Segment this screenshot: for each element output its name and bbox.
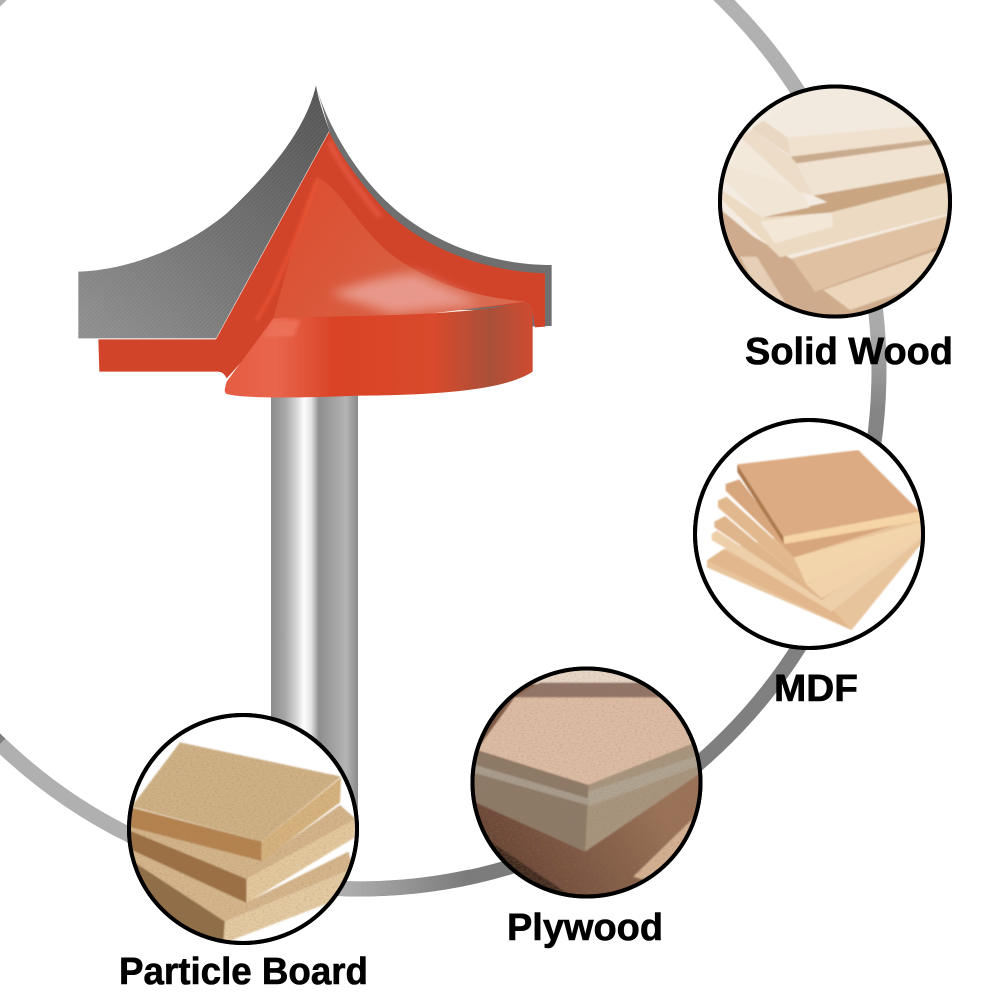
gray connecting arc: [0, 0, 879, 889]
carbide blade left: [78, 85, 329, 338]
particle board ring: [129, 715, 357, 943]
brushed texture: [78, 85, 329, 338]
label: plywood: Plywood: [507, 907, 663, 949]
particle board stack: [128, 742, 356, 943]
band top highlight: [263, 321, 300, 337]
plywood disc: [472, 668, 700, 896]
upper tip highlight: [329, 142, 380, 217]
carbide edge right: [293, 85, 552, 327]
material: plywood photo circle: [467, 660, 707, 903]
plywood ring: [472, 668, 700, 896]
red body back: [98, 132, 545, 378]
solid wood disc: [720, 86, 950, 316]
label: solid wood: Solid Wood: [745, 331, 953, 373]
material: particle board photo circle: [128, 715, 357, 943]
bit cutter head: [78, 85, 552, 397]
red concave face: [273, 177, 525, 318]
particle board disc: [129, 715, 357, 943]
plywood boards: [474, 670, 698, 894]
mdf ring: [695, 420, 923, 648]
label: particle board: Particle Board: [119, 951, 368, 993]
streak highlight: [257, 180, 317, 320]
solid wood boards: [722, 88, 948, 314]
material: solid wood photo circle: [713, 80, 957, 323]
highlight on face: [330, 273, 480, 313]
red front band: [225, 302, 533, 397]
router bit: [78, 85, 552, 815]
label: mdf: MDF: [774, 668, 858, 710]
mdf boards: [707, 450, 922, 630]
mdf disc: [695, 420, 923, 648]
solid wood ring: [720, 86, 950, 316]
material: mdf photo circle: [695, 420, 923, 648]
bit shank: [271, 385, 358, 815]
